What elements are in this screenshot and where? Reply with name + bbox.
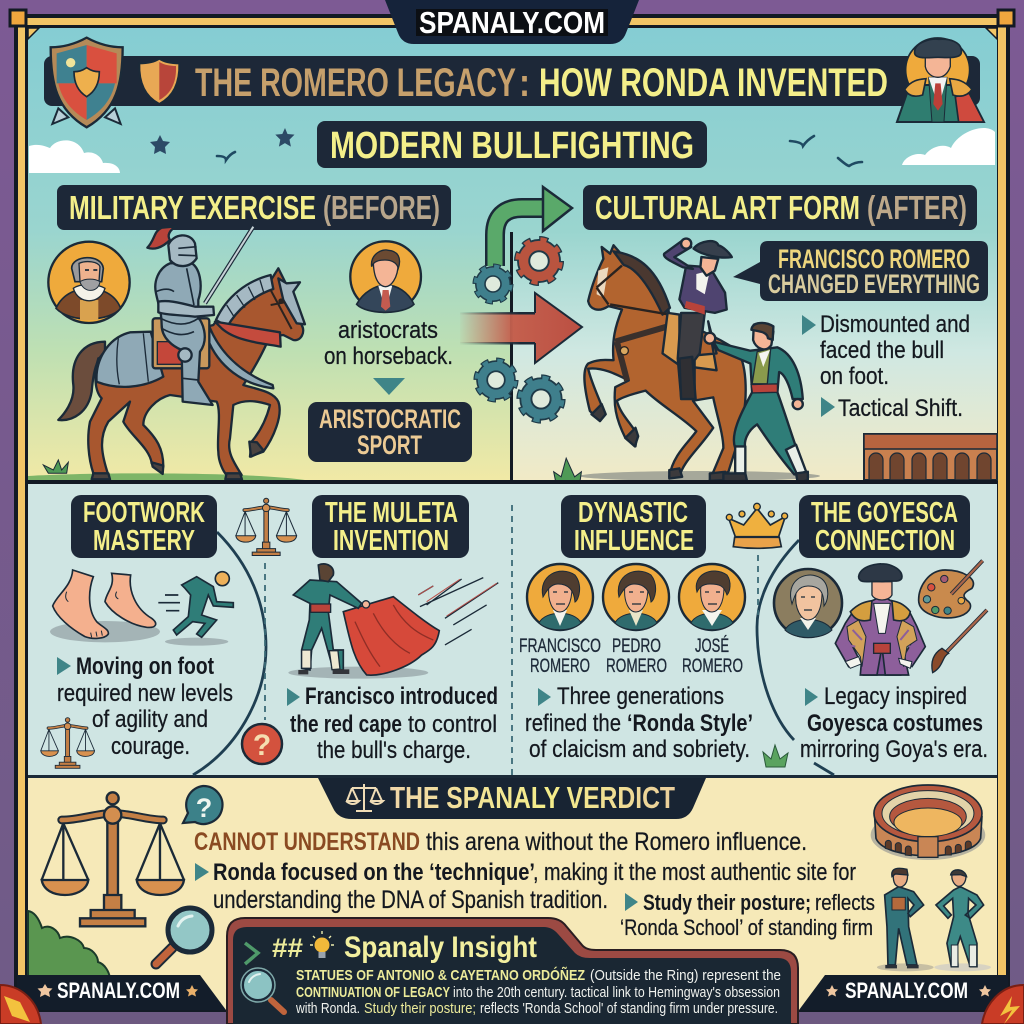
- text: Francisco red cape: the bull's charge.: [317, 737, 471, 764]
- icon: palette and brushes: [919, 561, 987, 673]
- label: aristocratic sport: SPORT: [357, 430, 422, 460]
- verdict banner: THE SPANALY VERDICT: [390, 780, 675, 815]
- portrait: Francisco Romero: [527, 564, 593, 630]
- label: aristocratic sport: [308, 402, 472, 462]
- text: aristocrats on horseback: [324, 317, 453, 370]
- portrait: nobleman: [48, 242, 130, 323]
- icon: crown: [726, 503, 788, 548]
- text: Francisco red cape: [287, 683, 498, 764]
- heading: goyesca: CONNECTION: [815, 525, 955, 557]
- heading: dynastic: DYNASTIC: [578, 497, 688, 529]
- icon: small shield: [139, 59, 179, 104]
- portrait: Pedro Romero: [603, 564, 669, 630]
- text: three generations: refined the: [525, 710, 621, 737]
- icon: bush: [28, 911, 110, 978]
- icon: bullring: [871, 785, 985, 860]
- labels: Romero names: JOSÉ: [695, 636, 729, 657]
- text: moving on foot: courage.: [111, 733, 190, 760]
- icon: light bulb: [310, 931, 334, 958]
- text: three generations: of claicism and sobriety.: [529, 736, 750, 763]
- heading: footwork: [71, 495, 217, 558]
- icon: large magnifier: [156, 908, 212, 964]
- corner burst left: [0, 985, 41, 1024]
- illustration: rider and matador on foot: [554, 239, 808, 484]
- text: legacy inspired: mirroring Goya's era.: [800, 736, 988, 763]
- text: Ronda technique: Ronda focused on the ‘technique’: [213, 859, 535, 886]
- panel: verdict section: [28, 778, 997, 1010]
- labels: Romero names: PEDRO: [612, 636, 661, 657]
- insight body text: Study their posture;: [364, 1000, 476, 1017]
- heading: dynastic: INFLUENCE: [574, 525, 694, 557]
- icon: matador with red cape: [288, 564, 498, 679]
- footer badge left: SPANALY.COM: [57, 978, 180, 1003]
- icon: question bubble: ?: [196, 793, 212, 823]
- footer badge left: [17, 975, 226, 1010]
- text: cannot understand: CANNOT UNDERSTAND: [194, 828, 420, 856]
- icon: gear red: [518, 240, 560, 282]
- icon: gear teal mid: [477, 361, 515, 399]
- panel: middle section: [28, 484, 997, 775]
- icon: question badge: [242, 724, 282, 764]
- text: dismounted: [802, 311, 970, 390]
- text: moving on foot: [57, 653, 233, 760]
- labels: Romero names: ROMERO: [530, 656, 590, 677]
- text: dismounted: on foot.: [820, 363, 889, 390]
- icon: question bubble: [183, 786, 222, 824]
- text: study their posture: ‘Ronda School’ of standing firm: [620, 915, 873, 940]
- text: moving on foot: Moving on foot: [76, 653, 214, 680]
- sky upper left: [28, 28, 512, 480]
- heading: before: (BEFORE): [323, 189, 440, 226]
- labels: Romero names: ROMERO: [682, 656, 743, 677]
- ground right: [580, 471, 820, 481]
- portrait: aristocrat: [350, 241, 421, 312]
- insight heading: Spanaly Insight: [344, 931, 537, 964]
- text: aristocrats on horseback: aristocrats: [338, 317, 438, 344]
- footer badge right: SPANALY.COM: [845, 978, 968, 1003]
- callout: Francisco Romero: [733, 241, 988, 301]
- heading: muleta: INVENTION: [333, 525, 449, 557]
- icon: grass: [763, 745, 788, 767]
- portrait: Goya: [774, 569, 842, 638]
- icon: scales top: [236, 498, 297, 556]
- text: three generations: Three generations: [557, 683, 724, 710]
- text: cannot understand: [194, 828, 807, 856]
- panel: Spanaly Insight: [227, 918, 798, 1024]
- text: legacy inspired: Goyesca costumes: [807, 710, 983, 737]
- illustration: bullring arches: [864, 434, 997, 480]
- arrow: red transition: [460, 293, 582, 363]
- text: legacy inspired: [800, 683, 988, 763]
- insight body text: into the 20th century. tactical link to Hemingway's obsession: [453, 984, 780, 1001]
- top site badge: SPANALY.COM: [419, 5, 605, 40]
- text: moving on foot: of agility and: [92, 706, 208, 733]
- text: Francisco red cape: Francisco introduced: [305, 683, 498, 710]
- title banner: HOW RONDA INVENTED: [539, 61, 888, 105]
- title banner: :: [519, 61, 530, 105]
- heading: goyesca: THE GOYESCA: [811, 497, 958, 529]
- insight body text: CONTINUATION OF LEGACY: [296, 984, 450, 1001]
- cloud right: [902, 128, 995, 165]
- icon: large scales: [42, 792, 184, 926]
- icon: question badge: ?: [253, 729, 271, 762]
- labels: Romero names: FRANCISCO: [519, 636, 601, 657]
- text: study their posture: Study their posture;: [643, 890, 811, 915]
- illustration: armoured knight on horse: [43, 226, 305, 479]
- icon: feet and runner: [50, 570, 233, 646]
- labels: Romero names: ROMERO: [606, 656, 667, 677]
- heading: before: MILITARY EXERCISE: [69, 189, 316, 226]
- heading: after: CULTURAL ART FORM: [595, 189, 860, 226]
- text: three generations: [525, 683, 753, 763]
- label: aristocratic sport: ARISTOCRATIC: [319, 404, 461, 434]
- title banner: THE ROMERO LEGACY: [195, 61, 516, 105]
- arrow: down triangle: [373, 378, 405, 395]
- insight body text: (Outside the Ring) represent the: [590, 967, 781, 984]
- frame corner triangles: [28, 28, 997, 39]
- sky upper right: [512, 28, 997, 480]
- insight body text: STATUES OF ANTONIO & CAYETANO ORDÓÑEZ: [296, 966, 585, 984]
- insight heading: [245, 931, 537, 964]
- cloud left: [29, 140, 120, 173]
- heading: muleta: [312, 495, 469, 558]
- insight body text: [295, 966, 781, 1017]
- text: three generations: ‘Ronda Style’: [627, 710, 753, 737]
- text: study their posture: reflects: [815, 890, 875, 915]
- birds: [217, 136, 862, 166]
- heading: footwork: FOOTWORK: [83, 497, 205, 529]
- labels: Romero names: [519, 636, 743, 677]
- text: cannot understand: this arena without the Romero influence.: [426, 828, 807, 856]
- text: Ronda technique: understanding the DNA of Spanish tradition.: [213, 886, 608, 914]
- arrow: green transition: [495, 187, 572, 266]
- text: moving on foot: required new levels: [57, 680, 233, 707]
- text: Ronda technique: , making it the most authentic site for: [533, 859, 856, 886]
- insight body text: reflects 'Ronda School' of standing firm under pressure.: [480, 1000, 778, 1017]
- icon: gear teal top: [476, 267, 510, 301]
- heading: before: [57, 185, 451, 230]
- centre divider: [510, 232, 513, 480]
- heading: goyesca: [799, 495, 970, 558]
- text: Francisco red cape: the red cape: [290, 711, 402, 738]
- figure: Goyesca costume: [835, 564, 925, 675]
- footer badge right: [799, 975, 1008, 1010]
- icon: scales lower left: [41, 718, 95, 768]
- text: aristocrats on horseback: on horseback.: [324, 343, 453, 370]
- top site badge: [385, 0, 639, 44]
- text: dismounted: Dismounted and: [820, 311, 970, 338]
- text: tactical shift: Tactical Shift.: [838, 395, 963, 422]
- title banner: [44, 56, 980, 106]
- column dividers: [193, 505, 834, 775]
- portrait: Jose Romero: [679, 564, 745, 630]
- heading: after: (AFTER): [867, 189, 967, 226]
- corner burst right: [982, 985, 1024, 1024]
- text: Ronda technique: [195, 859, 856, 914]
- insight heading: ##: [272, 933, 303, 963]
- text: dismounted: faced the bull: [820, 337, 944, 364]
- heading: footwork: MASTERY: [93, 525, 195, 557]
- heading: muleta: THE MULETA: [325, 497, 458, 529]
- text: legacy inspired: Legacy inspired: [824, 683, 967, 710]
- icon: gear teal low: [521, 379, 561, 419]
- text: Francisco red cape: to control: [408, 711, 497, 738]
- insight body text: with Ronda.: [295, 1000, 360, 1017]
- icon: crest shield: [51, 38, 123, 127]
- ground left: [28, 473, 305, 480]
- star icons: [150, 128, 294, 154]
- subtitle banner: MODERN BULLFIGHTING: [330, 125, 694, 167]
- verdict banner: [318, 778, 706, 819]
- text: study their posture: [620, 890, 875, 940]
- icon: matador bust: [897, 38, 984, 122]
- figure: statues of Ordonez: [877, 868, 991, 971]
- heading: dynastic: [561, 495, 706, 558]
- icon: small magnifier: [241, 968, 284, 1012]
